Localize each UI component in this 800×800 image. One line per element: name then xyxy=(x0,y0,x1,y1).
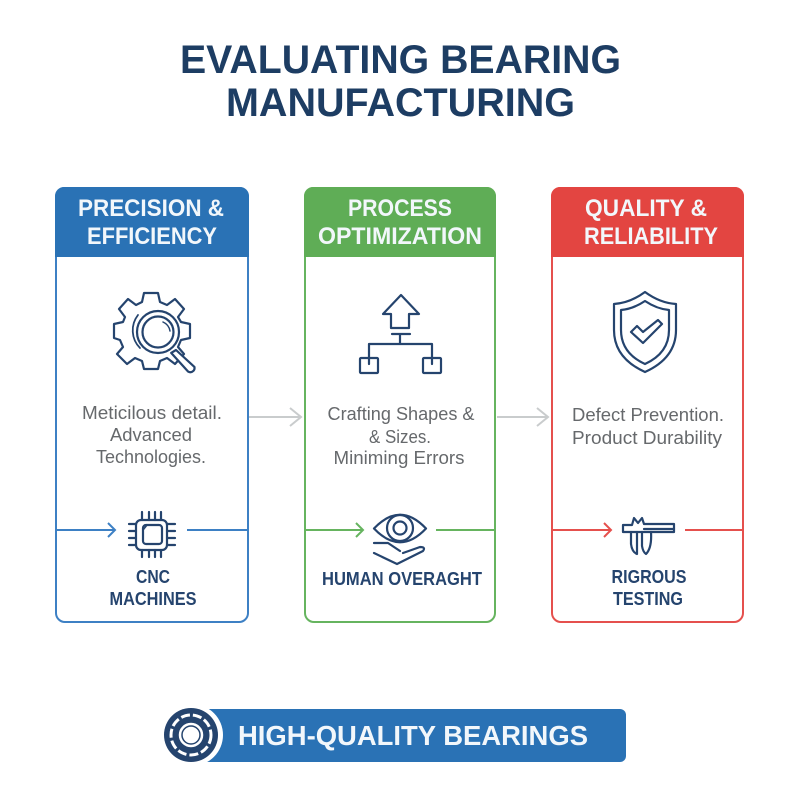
header: quality and reliability xyxy=(551,187,744,257)
header: precision and efficiency: EFFICIENCY xyxy=(87,223,217,250)
label: cnc machines xyxy=(110,567,196,609)
description text: & Sizes. xyxy=(369,426,431,447)
header: quality and reliability: QUALITY & xyxy=(585,195,707,222)
description text: Technologies. xyxy=(96,446,206,467)
label: rigorous testing: RIGROUS xyxy=(612,567,686,587)
header: process optimization: OPTIMIZATION xyxy=(318,223,482,250)
label: rigorous testing: TESTING xyxy=(613,589,683,609)
header: precision and efficiency: PRECISION & xyxy=(78,195,224,222)
icon: upward arrow with hierarchy xyxy=(360,295,441,373)
header: quality and reliability: RELIABILITY xyxy=(584,223,718,250)
icon: bearing xyxy=(161,704,223,766)
icon: shield with check xyxy=(614,292,676,372)
label: rigorous testing xyxy=(612,567,686,609)
description text: Meticilous detail. xyxy=(82,402,222,423)
icon: gear with magnifying glass xyxy=(114,293,198,373)
label: cnc machines: CNC xyxy=(136,567,170,587)
description text: Crafting Shapes & xyxy=(328,403,475,424)
arrow into chip icon xyxy=(56,523,248,537)
title xyxy=(180,38,621,125)
arrow into eye icon xyxy=(305,523,495,537)
description text xyxy=(82,402,222,467)
description text: Defect Prevention. xyxy=(572,404,724,425)
label: cnc machines: MACHINES xyxy=(110,589,196,609)
title: MANUFACTURING xyxy=(226,81,575,125)
arrow: panel 2 to panel 3 xyxy=(497,408,548,426)
icon: caliper xyxy=(623,518,674,554)
icon: chip xyxy=(129,512,175,557)
title: EVALUATING BEARING xyxy=(180,38,621,82)
description text xyxy=(328,403,475,468)
header: process optimization xyxy=(304,187,496,257)
banner: high-quality bearings: HIGH-QUALITY BEARINGS xyxy=(238,720,588,751)
banner: high-quality bearings xyxy=(161,704,626,766)
panel: quality and reliability xyxy=(551,187,744,622)
panel: precision and efficiency xyxy=(55,187,249,622)
description text: Product Durability xyxy=(572,427,723,448)
description text xyxy=(572,404,724,448)
arrow: panel 1 to panel 2 xyxy=(249,408,301,426)
arrow into caliper icon xyxy=(552,523,743,537)
header: precision and efficiency xyxy=(55,187,249,257)
label: human overaght: HUMAN OVERAGHT xyxy=(322,569,482,589)
header: process optimization: PROCESS xyxy=(348,195,452,222)
description text: Miniming Errors xyxy=(334,447,464,468)
panel: process optimization xyxy=(304,187,496,622)
icon: eye over hand xyxy=(374,515,426,564)
description text: Advanced xyxy=(110,424,192,445)
